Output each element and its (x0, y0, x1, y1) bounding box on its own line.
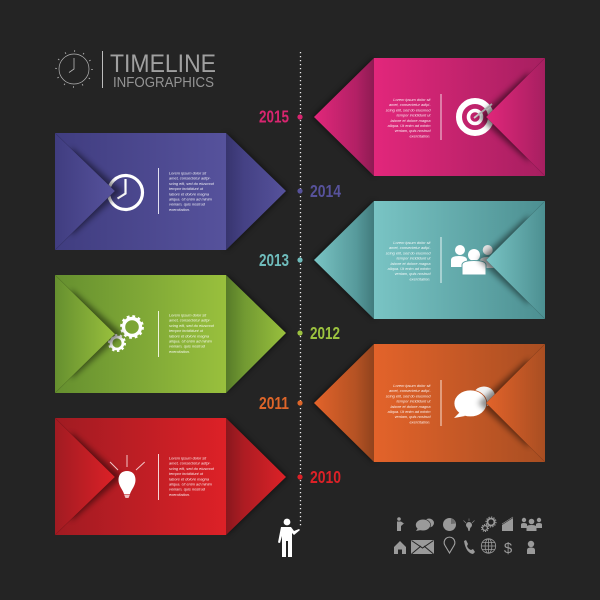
panel: 2014 blue (55, 132, 288, 251)
text block: exercitation. (410, 276, 430, 281)
icon: person pointing (397, 517, 405, 531)
icon: home (394, 541, 406, 554)
text block: scing elit, sed do eiusmod (386, 107, 431, 112)
text block: Lorem ipsum dolor sit (169, 456, 207, 460)
text block: amet, consectetur adipi- (389, 388, 431, 393)
text block: aliqua. Ut enim ad minim (169, 196, 213, 202)
text block: labore et dolore magna (390, 261, 431, 266)
text block: amet, consectetur adipi- (169, 176, 211, 181)
text block (386, 97, 431, 138)
icon: clock (108, 176, 142, 210)
icon: chat bubbles (454, 386, 495, 418)
icon: chat (416, 518, 434, 531)
text block: aliqua. Ut enim ad minim (169, 338, 213, 344)
text block: Lorem ipsum dolor sit (393, 240, 431, 245)
2012 year label: 2012 (310, 323, 340, 343)
2015 year label: 2015 (259, 106, 289, 126)
panel: 2013 teal (312, 200, 545, 320)
text block: labore et dolore magna (390, 118, 431, 123)
text block: amet, consectetur adipi- (389, 102, 431, 107)
text block (169, 312, 215, 354)
text block: veniam, quis nostrud (169, 202, 206, 207)
text block: scing elit, sed do eiusmod (386, 250, 431, 255)
icon: envelope (411, 540, 434, 554)
icon: presenter figure (278, 519, 300, 557)
icon: phone (464, 540, 475, 554)
text block: aliqua. Ut enim ad minim (388, 266, 431, 271)
text block: veniam, quis nostrud (395, 414, 431, 419)
icon: bar chart (502, 517, 513, 531)
2011 year label: 2011 (259, 393, 289, 413)
panel: 2012 green (55, 274, 288, 393)
icon: group (521, 518, 542, 531)
text block: aliqua. Ut enim ad minim (388, 409, 431, 414)
text block: labore et dolore magna (169, 191, 210, 196)
text block: Lorem ipsum dolor sit (393, 383, 431, 388)
text block (169, 170, 215, 212)
text block: scing elit, sed do eiusmod (169, 323, 215, 328)
title divider and text: TIMELINE (110, 50, 216, 78)
text block: tempor incididunt ut (397, 256, 431, 261)
text block: veniam, quis nostrud (395, 271, 431, 276)
text block: labore et dolore magna (390, 404, 431, 409)
text block: exercitation. (169, 492, 190, 497)
text block: labore et dolore magna (169, 476, 210, 481)
text block (386, 383, 431, 424)
text block: exercitation. (169, 207, 190, 212)
text block: exercitation. (410, 133, 430, 138)
text block: exercitation. (410, 419, 430, 424)
icon: gears (482, 517, 496, 532)
icon: map pin (444, 537, 455, 553)
text block: labore et dolore magna (169, 333, 210, 338)
icon: gears (109, 316, 142, 351)
text block: veniam, quis nostrud (169, 487, 206, 492)
icon: user (527, 541, 535, 554)
text block: veniam, quis nostrud (169, 344, 206, 349)
icon: light bulb (110, 455, 145, 498)
icon: dollar: $ (504, 540, 513, 557)
2012 year label (297, 323, 340, 343)
2010 year label: 2010 (310, 467, 341, 487)
text block: tempor incididunt ut (169, 471, 204, 476)
text block: scing elit, sed do eiusmod (386, 393, 431, 398)
icon: globe (481, 539, 496, 553)
text block: amet, consectetur adipi- (169, 318, 211, 323)
text block: scing elit, sed do eiusmod (169, 181, 215, 186)
icon row: small grey icons (394, 517, 542, 557)
icon: pie chart (443, 518, 456, 531)
text block (169, 456, 215, 497)
panel: 2015 pink (312, 57, 545, 177)
text block: amet, consectetur adipi- (169, 461, 211, 466)
2014 year label: 2014 (310, 181, 341, 201)
panel: 2011 orange (312, 343, 545, 463)
panel: 2010 red (55, 417, 288, 536)
text block: tempor incididunt ut (169, 328, 204, 333)
icon: target (459, 101, 492, 133)
text block: aliqua. Ut enim ad minim (169, 482, 213, 486)
timeline dotted line (300, 52, 302, 527)
icon: bulb (464, 518, 474, 531)
title divider and text (102, 50, 216, 91)
text block: amet, consectetur adipi- (389, 245, 431, 250)
text block: tempor incididunt ut (397, 399, 431, 404)
text block: Lorem ipsum dolor sit (169, 170, 207, 176)
text block: tempor incididunt ut (169, 186, 204, 191)
text block (386, 240, 431, 281)
text block: aliqua. Ut enim ad minim (388, 123, 431, 128)
2013 year label: 2013 (259, 250, 289, 270)
title divider and text: INFOGRAPHICS (113, 75, 214, 91)
icon: team (451, 245, 495, 275)
text block: Lorem ipsum dolor sit (393, 97, 431, 102)
text block: tempor incididunt ut (397, 113, 431, 118)
2014 year label (297, 181, 341, 201)
header title block (56, 50, 216, 91)
2010 year label (297, 467, 341, 487)
text block: veniam, quis nostrud (395, 128, 431, 133)
icon: outline clock (56, 51, 92, 87)
text block: Lorem ipsum dolor sit (169, 312, 207, 318)
text block: exercitation. (169, 349, 190, 354)
text block: scing elit, sed do eiusmod (169, 466, 215, 471)
